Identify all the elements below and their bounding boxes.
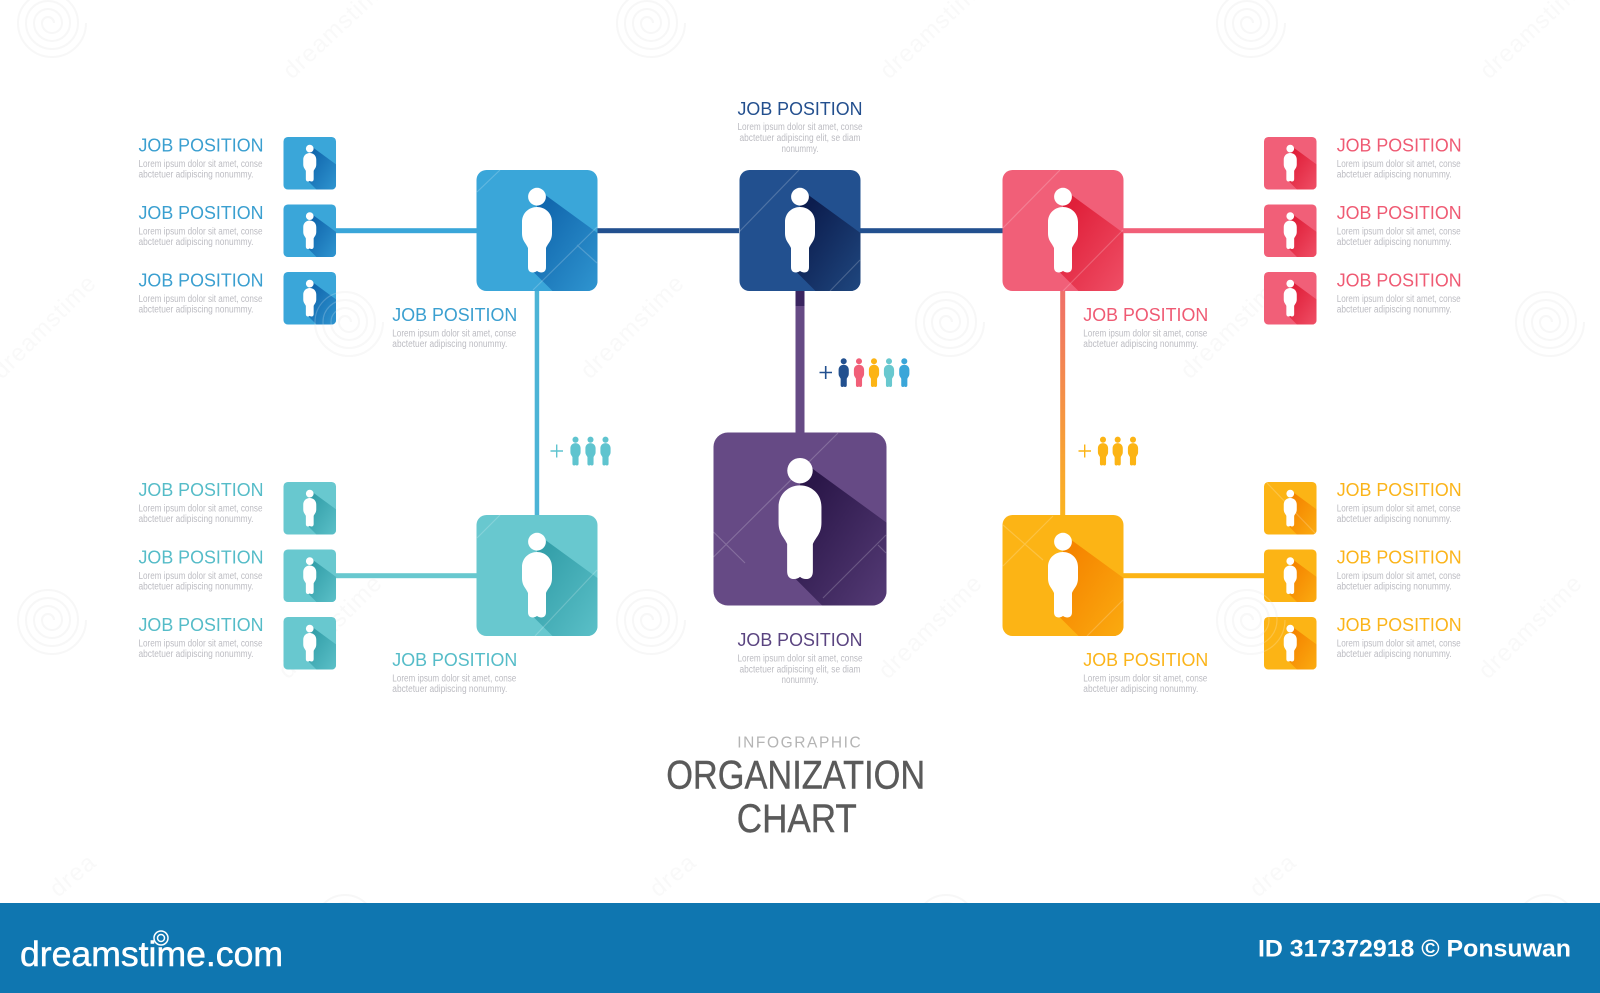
text: dreamstime [575, 269, 690, 384]
icon: small teal 1 [284, 482, 336, 535]
text: yellow manager: abctetuer adipiscing nonummy. [1083, 684, 1198, 695]
text: drea [45, 848, 102, 903]
connector: blue to small blue [336, 228, 477, 233]
text: teal row 3: Lorem ipsum dolor sit amet, conse [138, 638, 263, 650]
icon: small teal 2 [284, 550, 336, 602]
text: teal row 1: abctetuer adipiscing nonummy. [138, 514, 254, 525]
text: dreamstime [1175, 269, 1290, 384]
icon: small red 1 [1264, 137, 1317, 190]
text: blue row 1 [138, 135, 264, 180]
mini team: plus five people [820, 358, 909, 387]
connector: red to yellow [1060, 291, 1065, 515]
text: yellow row 2: JOB POSITION [1337, 546, 1462, 568]
text: dreamstime [1473, 569, 1588, 684]
text: teal row 3 [138, 614, 264, 660]
icon: small red 2 [1264, 204, 1317, 257]
connector: yellow to small yellow [1123, 573, 1264, 578]
text: yellow manager: Lorem ipsum dolor sit amet, conse [1083, 674, 1208, 684]
text: red row 3 [1337, 270, 1462, 316]
text: red row 2: JOB POSITION [1337, 202, 1462, 223]
text: red row 1: JOB POSITION [1337, 135, 1462, 156]
text: red manager: Lorem ipsum dolor sit amet, conse [1083, 328, 1208, 340]
text: blue row 2: abctetuer adipiscing nonummy. [138, 237, 254, 248]
text: drea [1245, 848, 1302, 903]
connector: blue to teal [535, 291, 539, 515]
text: purple lead [738, 629, 863, 686]
connector: blue to navy [597, 228, 739, 233]
text: teal row 1: Lorem ipsum dolor sit amet, conse [138, 504, 263, 514]
text: blue row 3: Lorem ipsum dolor sit amet, conse [138, 294, 263, 305]
text: blue row 1: abctetuer adipiscing nonummy. [138, 170, 254, 180]
icon: small yellow 3 [1264, 617, 1317, 670]
mini team: plus three teal people [550, 437, 611, 465]
text: yellow manager [1083, 649, 1208, 695]
text: navy director: Lorem ipsum dolor sit amet, conse [738, 122, 863, 133]
text: blue manager: JOB POSITION [392, 304, 517, 325]
icon: purple lead [714, 432, 887, 606]
connector: red to small red [1123, 228, 1264, 233]
text: teal row 3: abctetuer adipiscing nonummy. [138, 649, 254, 660]
text: navy director: abctetuer adipiscing elit, se diam [740, 133, 860, 144]
text: purple lead: JOB POSITION [738, 629, 862, 650]
icon: small blue 2 [284, 204, 336, 257]
icon: small yellow 2 [1264, 550, 1317, 602]
text: purple lead: Lorem ipsum dolor sit amet, conse [738, 654, 863, 664]
text: yellow row 2: abctetuer adipiscing nonummy. [1337, 582, 1452, 592]
text: blue row 3: JOB POSITION [138, 270, 264, 290]
text: yellow row 3 [1337, 614, 1462, 660]
title: INFOGRAPHIC [737, 734, 861, 751]
icon: small teal 3 [284, 617, 336, 670]
text: yellow row 1 [1337, 479, 1462, 525]
text: dreamstime [273, 569, 388, 684]
title: CHART [737, 797, 857, 841]
text: yellow manager: JOB POSITION [1083, 649, 1208, 670]
text: teal row 3: JOB POSITION [138, 614, 264, 635]
text: red row 2: abctetuer adipiscing nonummy. [1337, 237, 1452, 248]
text: red row 2: Lorem ipsum dolor sit amet, conse [1337, 226, 1461, 238]
text: teal row 1 [138, 479, 264, 525]
text: teal row 2 [138, 546, 264, 592]
text: yellow row 1: JOB POSITION [1337, 479, 1462, 500]
text: red manager: JOB POSITION [1083, 304, 1208, 325]
text: red row 3: Lorem ipsum dolor sit amet, conse [1337, 294, 1461, 305]
icon: yellow manager [1002, 515, 1124, 636]
icon: small yellow 1 [1264, 482, 1317, 535]
text: navy director: nonummy. [782, 144, 818, 155]
text: red row 3: abctetuer adipiscing nonummy. [1337, 304, 1452, 316]
icon: small red 3 [1264, 272, 1317, 325]
icon: small blue 3 [284, 272, 336, 325]
icon: small blue 1 [284, 137, 336, 190]
mini team: plus three yellow people [1078, 437, 1138, 465]
title [666, 734, 925, 841]
connector: teal to small teal [336, 573, 477, 578]
text: yellow row 1: abctetuer adipiscing nonummy. [1337, 514, 1452, 525]
text: blue manager: abctetuer adipiscing nonummy. [392, 339, 507, 350]
icon: blue manager [476, 170, 598, 291]
text: blue row 2: Lorem ipsum dolor sit amet, conse [138, 226, 263, 238]
text: red row 1: abctetuer adipiscing nonummy. [1337, 170, 1452, 180]
text: navy director [738, 98, 863, 155]
text: yellow row 2: Lorem ipsum dolor sit amet, conse [1337, 571, 1461, 582]
text: yellow row 3: abctetuer adipiscing nonummy. [1337, 649, 1452, 660]
text: drea [645, 848, 702, 903]
text: yellow row 3: Lorem ipsum dolor sit amet, conse [1337, 638, 1461, 650]
footer logo: dreamstime.com [20, 935, 283, 974]
title: ORGANIZATION [666, 753, 925, 797]
text: red row 3: JOB POSITION [1337, 270, 1462, 290]
text: blue row 3 [138, 270, 264, 316]
text: teal manager: Lorem ipsum dolor sit amet, conse [392, 674, 517, 684]
text: red row 2 [1337, 202, 1462, 248]
text: red manager: abctetuer adipiscing nonummy. [1083, 339, 1198, 350]
text: teal row 1: JOB POSITION [138, 479, 264, 500]
connector: navy to purple [796, 291, 804, 433]
connector: navy to red [860, 228, 1003, 233]
text: dreamstime [873, 569, 988, 684]
text: red manager [1083, 304, 1208, 350]
icon: navy director [740, 170, 860, 291]
text: red row 1: Lorem ipsum dolor sit amet, conse [1337, 159, 1461, 170]
text: teal manager: abctetuer adipiscing nonummy. [392, 684, 507, 695]
text: blue row 2: JOB POSITION [138, 202, 264, 223]
text: teal row 2: JOB POSITION [138, 546, 264, 568]
icon: teal manager [476, 515, 598, 636]
text: teal row 2: Lorem ipsum dolor sit amet, conse [138, 571, 263, 582]
text: teal manager [392, 649, 517, 695]
icon: red manager [1002, 170, 1124, 291]
text: blue row 2 [138, 202, 264, 248]
text: teal row 2: abctetuer adipiscing nonummy. [138, 582, 254, 592]
footer credit: ID 317372918 © Ponsuwan [1258, 936, 1571, 963]
text: red row 1 [1337, 135, 1462, 180]
footer bar [0, 903, 1600, 993]
text: teal manager: JOB POSITION [392, 649, 517, 670]
text: blue row 3: abctetuer adipiscing nonummy. [138, 304, 254, 316]
text: blue row 1: Lorem ipsum dolor sit amet, conse [138, 159, 263, 170]
text: purple lead: abctetuer adipiscing elit, se diam [740, 664, 860, 676]
text: blue manager [392, 304, 517, 350]
text: yellow row 1: Lorem ipsum dolor sit amet, conse [1337, 504, 1461, 514]
text: navy director: JOB POSITION [738, 98, 862, 119]
text: yellow row 2 [1337, 546, 1462, 592]
text: purple lead: nonummy. [782, 675, 818, 686]
text: blue manager: Lorem ipsum dolor sit amet, conse [392, 328, 517, 340]
text: blue row 1: JOB POSITION [138, 135, 264, 156]
text: yellow row 3: JOB POSITION [1337, 614, 1462, 635]
